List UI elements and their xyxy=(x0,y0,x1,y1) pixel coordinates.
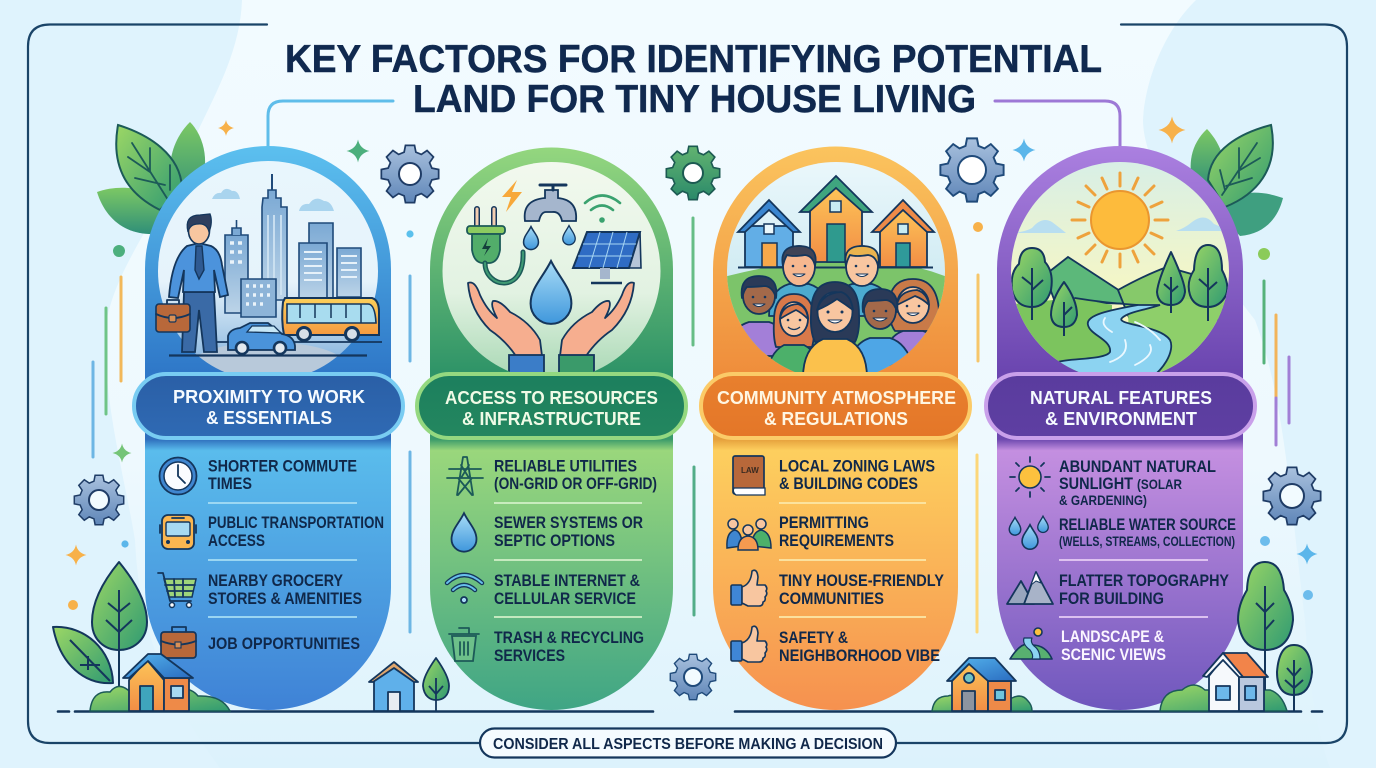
icon: scenic landscape xyxy=(1010,628,1052,659)
house xyxy=(123,654,193,711)
decorative sparkles and dots xyxy=(66,116,1318,610)
text: landscape and scenic views: SCENIC VIEWS xyxy=(1061,646,1166,664)
text: flatter topography: FLATTER TOPOGRAPHY xyxy=(1059,572,1229,590)
text: local zoning: & BUILDING CODES xyxy=(779,475,918,493)
text: stable internet: STABLE INTERNET & xyxy=(494,572,640,590)
pill heading: proximity: & ESSENTIALS xyxy=(206,407,332,428)
connector: title to first panel xyxy=(268,101,393,148)
panel 4: natural features and environment xyxy=(997,146,1243,710)
text: shorter commute times xyxy=(208,458,357,493)
list: proximity items xyxy=(158,458,384,658)
icon: water drop xyxy=(452,513,476,552)
accent lines xyxy=(93,218,1289,632)
illustration: neighbours and houses xyxy=(727,174,945,372)
scene: orange house with round window xyxy=(932,658,1032,711)
text: reliable utilities: RELIABLE UTILITIES xyxy=(494,458,637,476)
text: safety: NEIGHBORHOOD VIBE xyxy=(779,647,940,665)
scene: left tree, leaf and house xyxy=(53,562,230,711)
hands xyxy=(468,282,634,356)
leaves top left xyxy=(97,122,205,234)
person: centre xyxy=(803,282,867,378)
text: stable internet: CELLULAR SERVICE xyxy=(494,590,636,608)
icon: mountains xyxy=(1007,572,1053,604)
gears xyxy=(74,138,1321,700)
icon: sun xyxy=(1010,457,1050,497)
text: abundant natural sunlight xyxy=(1059,458,1216,508)
tree xyxy=(53,562,147,690)
bus xyxy=(282,298,379,340)
text: abundant natural sunlight: (SOLAR xyxy=(1137,476,1182,492)
text: tiny house friendly: COMMUNITIES xyxy=(779,590,884,608)
text: sewer systems xyxy=(494,514,643,550)
text: reliable water source: RELIABLE WATER SOURCE xyxy=(1059,516,1236,534)
title xyxy=(285,38,1102,121)
house: right xyxy=(872,200,934,267)
pill heading: natural features xyxy=(986,374,1255,438)
text: landscape and scenic views xyxy=(1061,628,1166,664)
pill heading: resources xyxy=(417,374,686,438)
text: tiny house friendly: TINY HOUSE-FRIENDLY xyxy=(779,572,944,590)
text: trash and recycling: TRASH & RECYCLING xyxy=(494,629,644,647)
icon: power pylon xyxy=(447,457,483,495)
pill heading: community: COMMUNITY ATMOSPHERE xyxy=(717,387,956,408)
house: blue xyxy=(738,200,800,267)
footer callout: CONSIDER ALL ASPECTS BEFORE MAKING A DECISION xyxy=(493,736,883,753)
text: shorter commute times: TIMES xyxy=(208,475,252,493)
title: KEY FACTORS FOR IDENTIFYING POTENTIAL xyxy=(285,38,1102,81)
icon: law book xyxy=(733,456,765,495)
icon: clock xyxy=(160,458,196,494)
text: reliable water source: (WELLS, STREAMS, COLLECTION) xyxy=(1059,533,1235,549)
panel 1: proximity to work and essentials xyxy=(145,146,391,710)
text: sewer systems: SEPTIC OPTIONS xyxy=(494,532,615,550)
person: front right xyxy=(857,288,908,372)
river xyxy=(1058,304,1172,372)
scene: small blue house and tree xyxy=(369,658,449,711)
solar panel xyxy=(573,232,641,283)
faucet xyxy=(525,185,576,221)
text: safety: SAFETY & xyxy=(779,629,848,647)
text: nearby grocery stores and amenities: NEARBY GROCERY xyxy=(208,572,343,590)
list: natural features items xyxy=(1007,457,1236,664)
icon: trash can xyxy=(449,628,479,661)
text: public transportation access xyxy=(208,514,384,550)
text: permitting: REQUIREMENTS xyxy=(779,532,894,550)
text: reliable water source xyxy=(1059,516,1236,549)
person: back right xyxy=(844,245,882,317)
icon: water drops xyxy=(1009,516,1048,549)
text: local zoning xyxy=(779,458,935,493)
text: stable internet xyxy=(494,572,640,608)
illustration: sun, hills, trees and river xyxy=(1011,172,1228,372)
plug xyxy=(467,209,523,283)
text: reliable utilities: (ON-GRID OR OFF-GRID) xyxy=(494,475,657,493)
list: community items xyxy=(727,456,944,665)
text: trash and recycling xyxy=(494,629,644,665)
text: trash and recycling: SERVICES xyxy=(494,647,565,665)
footer callout xyxy=(480,728,896,758)
text: local zoning: LOCAL ZONING LAWS xyxy=(779,458,935,476)
text: shorter commute times: SHORTER COMMUTE xyxy=(208,458,357,476)
text: abundant natural sunlight: & GARDENING) xyxy=(1059,492,1147,508)
icon: thumbs up xyxy=(731,626,767,662)
text: tiny house friendly xyxy=(779,572,944,608)
icon: bus xyxy=(160,515,196,549)
panel 3: community atmosphere and regulations xyxy=(713,146,958,710)
leaves top right xyxy=(1191,125,1283,236)
text: sewer systems: SEWER SYSTEMS OR xyxy=(494,514,643,532)
panel 2: access to resources and infrastructure xyxy=(430,147,673,710)
text: public transportation access: ACCESS xyxy=(208,532,265,550)
icon: group of people xyxy=(727,519,771,550)
title: LAND FOR TINY HOUSE LIVING xyxy=(413,78,976,121)
text: landscape and scenic views: LANDSCAPE & xyxy=(1061,628,1164,646)
icon: shopping cart xyxy=(158,573,196,608)
house: middle xyxy=(800,176,872,262)
text: reliable utilities xyxy=(494,458,657,493)
icon: thumbs up xyxy=(731,570,767,606)
text: job opportunities: JOB OPPORTUNITIES xyxy=(208,635,360,653)
ground line xyxy=(58,710,1322,713)
person: back left xyxy=(768,245,818,317)
people xyxy=(740,245,940,372)
text: flatter topography xyxy=(1059,572,1229,608)
person: right xyxy=(890,278,940,366)
pill heading: proximity: PROXIMITY TO WORK xyxy=(173,386,366,407)
illustration: city skyline xyxy=(199,174,362,372)
list: resources items xyxy=(447,457,657,665)
text: flatter topography: FOR BUILDING xyxy=(1059,590,1164,608)
car xyxy=(228,323,295,354)
connector: title to fourth panel xyxy=(995,101,1120,148)
icon: briefcase xyxy=(161,627,196,658)
icon: wifi xyxy=(447,575,482,603)
person: commuter xyxy=(156,214,228,352)
text: permitting: PERMITTING xyxy=(779,514,869,532)
pill heading: community: & REGULATIONS xyxy=(764,408,908,429)
text: permitting xyxy=(779,514,894,550)
scene: right trees, bushes and white house xyxy=(1160,562,1312,711)
icon: law book: LAW xyxy=(741,466,759,475)
person: left xyxy=(740,275,778,357)
text: nearby grocery stores and amenities: STORES & AMENITIES xyxy=(208,590,362,608)
wifi xyxy=(585,196,620,223)
text: abundant natural sunlight: ABUNDANT NATURAL xyxy=(1059,458,1216,476)
pill heading: natural features: NATURAL FEATURES xyxy=(1030,387,1212,408)
text: abundant natural sunlight: SUNLIGHT xyxy=(1059,475,1133,493)
pill heading: community xyxy=(701,374,970,438)
pill heading: resources: & INFRASTRUCTURE xyxy=(462,408,641,429)
pill heading: proximity xyxy=(134,374,403,438)
pill heading: resources: ACCESS TO RESOURCES xyxy=(445,387,658,408)
sun xyxy=(1072,173,1168,267)
person: front left xyxy=(770,293,814,372)
text: public transportation access: PUBLIC TRANSPORTATION xyxy=(208,514,384,532)
text: safety xyxy=(779,629,940,665)
pill heading: natural features: & ENVIRONMENT xyxy=(1045,408,1198,429)
illustration: utilities in hands xyxy=(467,180,641,375)
text: nearby grocery stores and amenities xyxy=(208,572,362,608)
trees xyxy=(1012,245,1227,336)
